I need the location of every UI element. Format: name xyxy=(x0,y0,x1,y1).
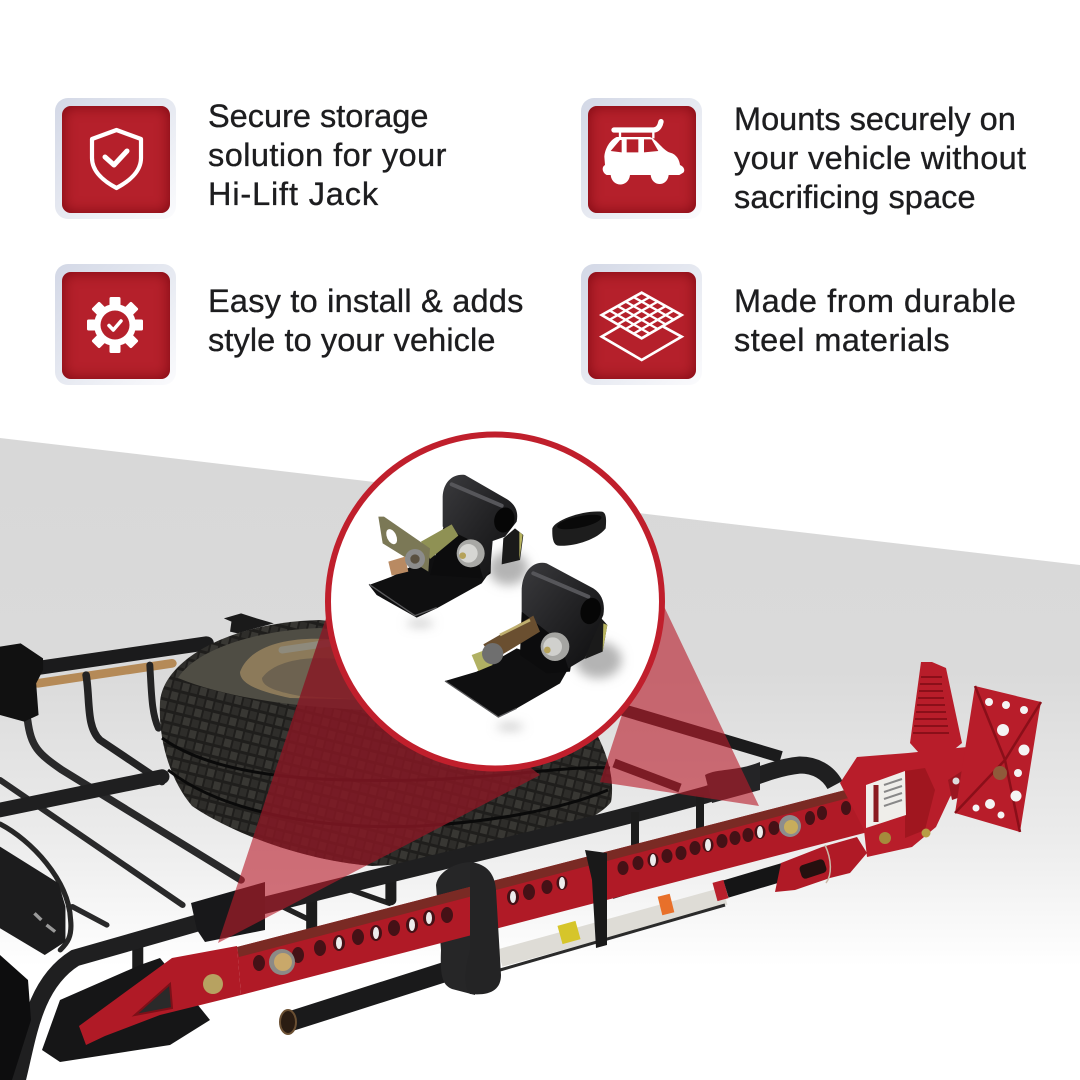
icon: car with roof rack xyxy=(581,98,702,219)
feature: mounts securely xyxy=(581,98,1026,219)
icon: shield xyxy=(55,98,176,219)
rubber strap front xyxy=(465,862,501,994)
text: mounts securely: your vehicle without xyxy=(734,140,1026,176)
jack runner xyxy=(948,753,990,800)
jack lever xyxy=(910,662,962,753)
text: durable steel: steel materials xyxy=(734,322,950,358)
roof rack rear xyxy=(0,613,391,990)
jack head xyxy=(840,747,981,857)
rubber band xyxy=(552,511,606,546)
feature: easy install xyxy=(55,264,524,385)
left clamp xyxy=(0,643,43,722)
winch box xyxy=(0,847,65,955)
bolts xyxy=(203,815,801,994)
text: secure storage: Secure storage xyxy=(208,98,428,134)
text: durable steel xyxy=(734,283,1016,358)
bracket one xyxy=(369,475,523,618)
text: secure storage: solution for your xyxy=(208,137,447,173)
rubber strap back xyxy=(436,862,475,995)
text: easy install: Easy to install & adds xyxy=(208,283,524,319)
feature: secure storage xyxy=(55,98,447,219)
grey background band xyxy=(0,438,1080,1080)
product scene xyxy=(0,432,1080,1080)
front rail xyxy=(0,710,835,1080)
text: durable steel: Made from durable xyxy=(734,283,1016,319)
jack base plate xyxy=(955,686,1041,832)
text: easy install xyxy=(208,283,524,358)
black handle tube xyxy=(280,870,790,1034)
lower jack mechanism xyxy=(775,837,867,892)
bracket shadows xyxy=(407,552,622,729)
tire seen through cone xyxy=(254,620,612,866)
steel bar xyxy=(237,787,868,995)
text: secure storage xyxy=(208,98,447,212)
velcro strap xyxy=(585,850,607,948)
text: mounts securely: Mounts securely on xyxy=(734,101,1016,137)
text: mounts securely xyxy=(734,101,1026,215)
text: easy install: style to your vehicle xyxy=(208,322,496,358)
top clamp xyxy=(224,613,274,633)
hi-lift jack xyxy=(79,662,1041,1045)
inset circle xyxy=(328,434,662,768)
red magnifier cones xyxy=(218,608,759,943)
text: secure storage: Hi-Lift Jack xyxy=(208,176,379,212)
bar base piece xyxy=(79,946,241,1045)
text: mounts securely: sacrificing space xyxy=(734,179,976,215)
spare tire xyxy=(160,620,612,866)
jack product label xyxy=(866,771,906,828)
icon: gear with check xyxy=(55,264,176,385)
bar holes xyxy=(253,801,851,971)
icon: layered grid xyxy=(581,264,702,385)
feature: durable steel xyxy=(581,264,1016,385)
bracket two xyxy=(445,563,607,718)
mounting brackets xyxy=(369,475,622,729)
